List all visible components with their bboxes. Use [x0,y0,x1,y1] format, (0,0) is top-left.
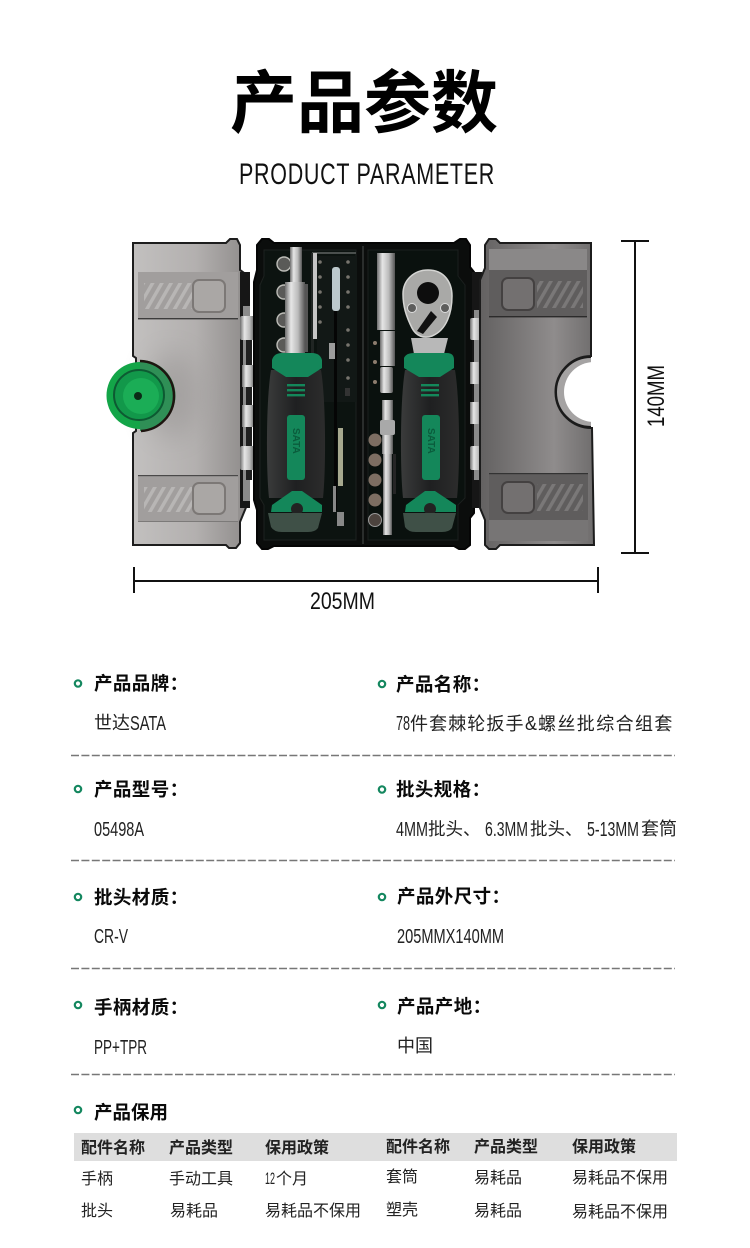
width label: 205MM [310,588,375,615]
spec: outer size [379,886,510,948]
spec: product name: 产品名称： [396,674,491,695]
table header: 保用政策 [265,1138,329,1157]
spec: model: 产品型号： [94,779,189,800]
table row 2: 易耗品不保用 [572,1203,668,1221]
right lid notch [556,357,594,427]
table header: 保用政策 [572,1137,636,1156]
width dimension line [134,567,598,615]
table row 2: 批头 [81,1202,113,1220]
spec: outer size: 产品外尺寸： [397,886,510,907]
spec: bit material [75,887,189,948]
table header [74,1133,677,1161]
sockets column left [277,257,291,352]
panel: center tray [254,239,474,549]
spec: outer size: 205MMX140MM [397,926,504,948]
table header: 配件名称 [386,1138,450,1156]
spec: product name [379,674,674,735]
table row 1: 手柄 [81,1170,113,1188]
table row 1: 个月 [276,1170,308,1188]
spec: bit size [379,779,677,841]
spec: handle material: 手柄材质： [94,997,189,1018]
table row 1: 易耗品 [474,1169,522,1187]
spec: brand [75,673,189,735]
spec: origin [379,996,492,1056]
table header: 配件名称 [81,1139,145,1157]
spec: brand: 产品品牌： [94,673,189,694]
table row 1: 易耗品不保用 [572,1169,668,1187]
title: 产品参数 [230,66,498,142]
height dimension line [621,241,670,553]
table row 1 [81,1168,668,1188]
table row 1: 手动工具 [169,1170,233,1188]
spec: product name: 78 [396,713,410,735]
table header: 产品类型 [474,1138,538,1156]
product photo: open tool case [106,239,594,549]
spec: handle material: PP+TPR [94,1037,147,1059]
spec: bit size: 5-13MM [587,819,639,841]
spec: bit size: 批头规格： [396,779,491,800]
height label: 140MM [643,365,670,427]
spec: model [75,779,189,841]
icon: green dial [106,360,175,431]
bit holder left [285,247,308,354]
subtitle: PRODUCT PARAMETER [239,158,495,191]
spec: product name: 螺丝批综合组套 [538,714,674,734]
spec: bit size: 6.3MM [485,819,528,841]
center sockets and extension [368,253,396,535]
spec: product name: & [525,713,538,735]
spec: bit size: 4MM [396,819,428,841]
dashed dividers [71,756,675,1074]
panel: right transparent lid [480,239,594,549]
spec: origin: 中国 [397,1036,433,1056]
panel: left transparent lid [133,239,247,548]
right handle [401,353,459,532]
panel: left hinge [240,272,255,508]
table row 2 [81,1201,668,1221]
spec: brand: SATA [130,713,166,735]
table row 2: 易耗品 [474,1202,522,1220]
table row 1: 12 [265,1169,275,1188]
ratchet head [403,270,452,354]
table row 1: 套筒 [386,1168,418,1186]
table row 2: 塑壳 [386,1201,418,1219]
spec: bit size: 套筒 [641,819,677,839]
spec: bit material: CR-V [94,926,128,948]
spec: bit size: 批头、 [530,819,582,839]
table header: 产品类型 [169,1139,233,1157]
panel: right hinge [470,272,483,508]
spec: origin: 产品产地： [397,996,492,1017]
heading: warranty: 产品保用 [94,1102,168,1123]
spec: brand: 世达 [94,713,130,733]
spec: model: 05498A [94,819,144,841]
warranty table [74,1133,677,1221]
left handle: SATA [290,428,301,454]
spec: product name: 件套棘轮扳手 [410,714,525,734]
table row 2: 易耗品不保用 [265,1202,361,1220]
right handle: SATA [425,428,436,454]
left handle [267,353,325,532]
spec: bit size: 批头、 [428,819,480,839]
spec: bit material: 批头材质： [94,887,189,908]
spec: handle material [75,997,189,1059]
bit rail [313,253,350,526]
table row 2: 易耗品 [170,1202,218,1220]
